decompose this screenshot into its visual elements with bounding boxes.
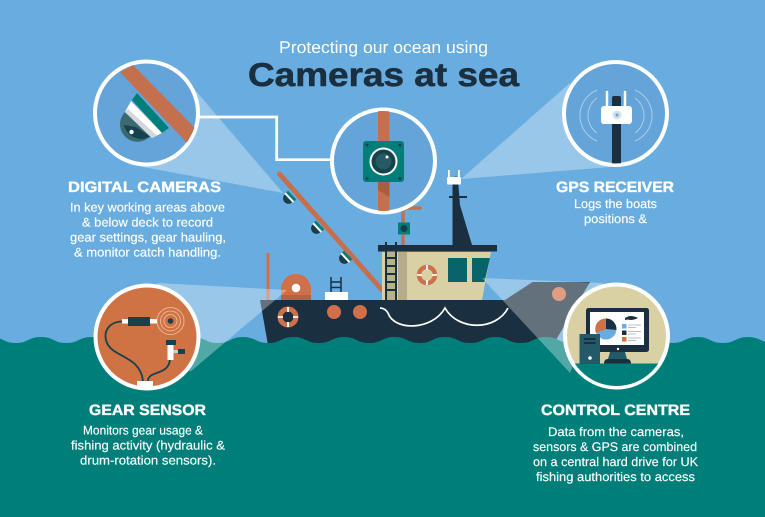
text block: digital cameras: [68, 179, 226, 260]
fish icon: [625, 316, 638, 320]
fishing boat: [260, 170, 590, 345]
description: drum-rotation sensors).: [80, 454, 216, 468]
camera arm: [120, 65, 195, 143]
heading: GPS RECEIVER: [556, 179, 674, 196]
text block: gps receiver: [556, 179, 674, 226]
text block: gear sensor: [71, 402, 226, 468]
inline sensor: [122, 317, 157, 326]
description: [574, 197, 657, 226]
circle: camera front close-up: [332, 110, 435, 212]
description: [70, 200, 226, 260]
net arcs: [380, 308, 508, 326]
signal arcs: [580, 90, 652, 141]
pie chart: [595, 318, 616, 340]
description: positions &: [584, 212, 648, 226]
subtitle: Protecting our ocean using: [279, 38, 488, 57]
gps unit: [601, 106, 632, 124]
description: & below deck to record: [82, 216, 213, 230]
description: sensors & GPS are combined: [533, 440, 697, 454]
description: fishing activity (hydraulic &: [71, 438, 226, 452]
description: & monitor catch handling.: [74, 246, 221, 260]
wheelhouse roof: [378, 245, 497, 252]
circle: gear sensor close-up: [96, 286, 198, 389]
circle: digital camera close-up: [95, 62, 198, 164]
main heading: Cameras at sea: [248, 56, 520, 93]
description: on a central hard drive for UK: [533, 455, 699, 469]
mooring post: [266, 253, 270, 301]
description: fishing authorities to access: [536, 470, 695, 484]
mast crossbar: [449, 196, 467, 198]
desk: [574, 364, 658, 386]
mast: [452, 176, 472, 245]
description: Monitors gear usage &: [83, 424, 204, 438]
camera screws: [366, 144, 402, 180]
t-sensor: [166, 340, 185, 360]
light beams: [143, 83, 610, 373]
chart legend: [622, 324, 641, 342]
camera pole: [378, 110, 390, 212]
text block: control centre: [533, 402, 699, 484]
gps pole: [612, 96, 621, 165]
small deck cameras: [280, 191, 352, 267]
description: Logs the boats: [574, 197, 657, 211]
sensor rings: [157, 308, 184, 334]
hull lifebuoy: [278, 307, 298, 327]
title: [248, 38, 520, 93]
winch: [281, 274, 311, 300]
gps receiver on mast: [447, 170, 461, 184]
computer tower: [580, 334, 600, 364]
portholes: [327, 287, 566, 319]
camera mount: [132, 93, 169, 133]
heading: CONTROL CENTRE: [541, 402, 690, 419]
camera dome: [120, 112, 150, 142]
heading: GEAR SENSOR: [89, 402, 206, 419]
gps antennas: [607, 92, 625, 108]
camera band: [125, 101, 162, 138]
circle: gps receiver close-up: [564, 62, 667, 165]
heading: DIGITAL CAMERAS: [68, 179, 221, 196]
description: In key working areas above: [70, 200, 225, 214]
hull: [260, 282, 590, 345]
ladder: [385, 242, 397, 300]
camera lens: [370, 148, 398, 176]
sensor cables: [106, 322, 170, 381]
camera body: [363, 141, 404, 182]
windows: [448, 258, 490, 282]
crane arm: [280, 174, 382, 290]
deck box and rail: [325, 277, 348, 300]
sea: [0, 337, 765, 517]
wheelhouse: [382, 252, 491, 300]
connector line: [198, 117, 335, 160]
monitor: [586, 308, 649, 364]
circle: control centre close-up: [560, 284, 675, 394]
orange pipe with camera: [398, 208, 420, 245]
description: Data from the cameras,: [548, 425, 684, 439]
dome highlight: [129, 130, 134, 134]
description: [71, 424, 226, 468]
description: [533, 425, 699, 484]
wheelhouse lifebuoy: [417, 265, 437, 285]
wheelhouse shadow: [398, 252, 407, 300]
description: gear settings, gear hauling,: [70, 230, 226, 244]
junction box: [137, 381, 153, 386]
